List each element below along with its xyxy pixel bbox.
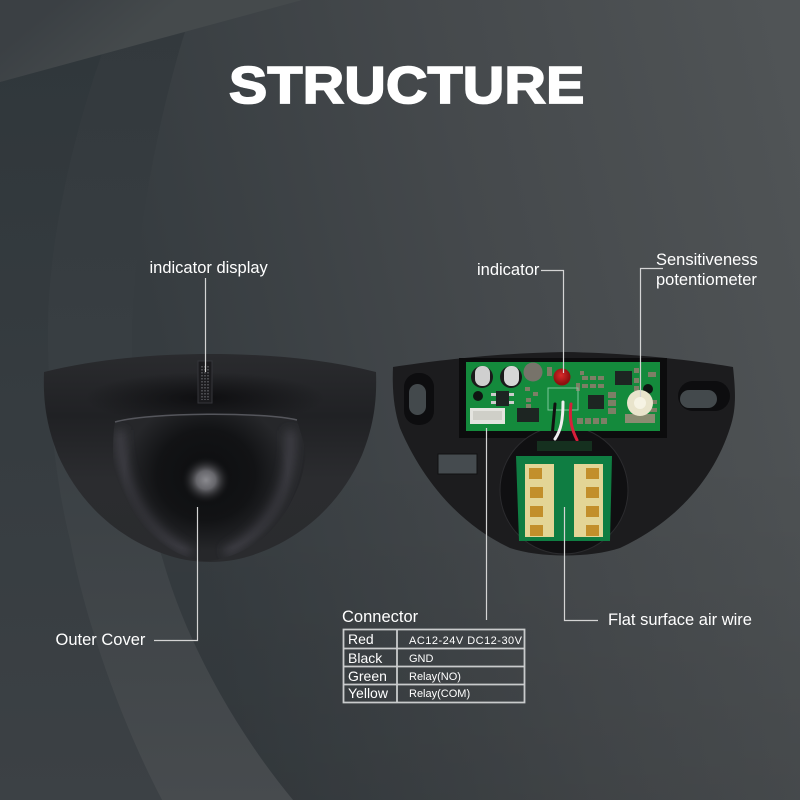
label: sensitiveness potentiometer: Sensitiveness xyxy=(656,251,758,269)
connector table xyxy=(344,630,524,702)
board recess xyxy=(459,358,667,438)
connector table: Red xyxy=(348,631,374,647)
wires xyxy=(552,402,577,440)
small components xyxy=(525,367,657,424)
mounting slots xyxy=(404,373,434,425)
title: STRUCTURE xyxy=(229,56,585,114)
LED xyxy=(554,368,570,386)
connector table: Relay(COM) xyxy=(409,688,470,700)
dome body xyxy=(44,354,376,562)
connector table: Black xyxy=(348,650,383,666)
connector table: Yellow xyxy=(348,685,389,701)
panel: outer cover product xyxy=(44,354,376,570)
label: outer cover: Outer Cover xyxy=(56,631,146,649)
label: flat surface air wire: Flat surface air wire xyxy=(608,611,752,629)
connector xyxy=(470,408,505,424)
rectangular window xyxy=(438,454,477,474)
rear housing xyxy=(393,352,735,556)
connector table: AC12-24V DC12-30V xyxy=(409,635,523,647)
antenna board xyxy=(516,441,612,541)
connector table: Relay(NO) xyxy=(409,671,461,683)
indicator display grille xyxy=(198,361,212,403)
wire terminal xyxy=(548,388,578,410)
lens highlight xyxy=(182,457,230,503)
label: indicator display: indicator display xyxy=(150,259,269,277)
panel: circuit board product xyxy=(393,352,735,556)
label: indicator: indicator xyxy=(477,261,540,279)
dome shading xyxy=(85,372,325,424)
capacitors xyxy=(471,366,493,388)
chips xyxy=(496,391,509,406)
connector table: Green xyxy=(348,668,387,684)
lens xyxy=(113,414,300,555)
label: sensitiveness potentiometer: potentiometer xyxy=(656,271,757,289)
antenna recess xyxy=(500,426,628,554)
patch panels xyxy=(525,464,554,537)
connector table: GND xyxy=(409,653,434,665)
label: connector: Connector xyxy=(342,608,419,626)
potentiometer xyxy=(625,414,655,423)
leader lines xyxy=(154,268,663,640)
screw holes xyxy=(473,391,483,401)
control board xyxy=(466,362,660,431)
